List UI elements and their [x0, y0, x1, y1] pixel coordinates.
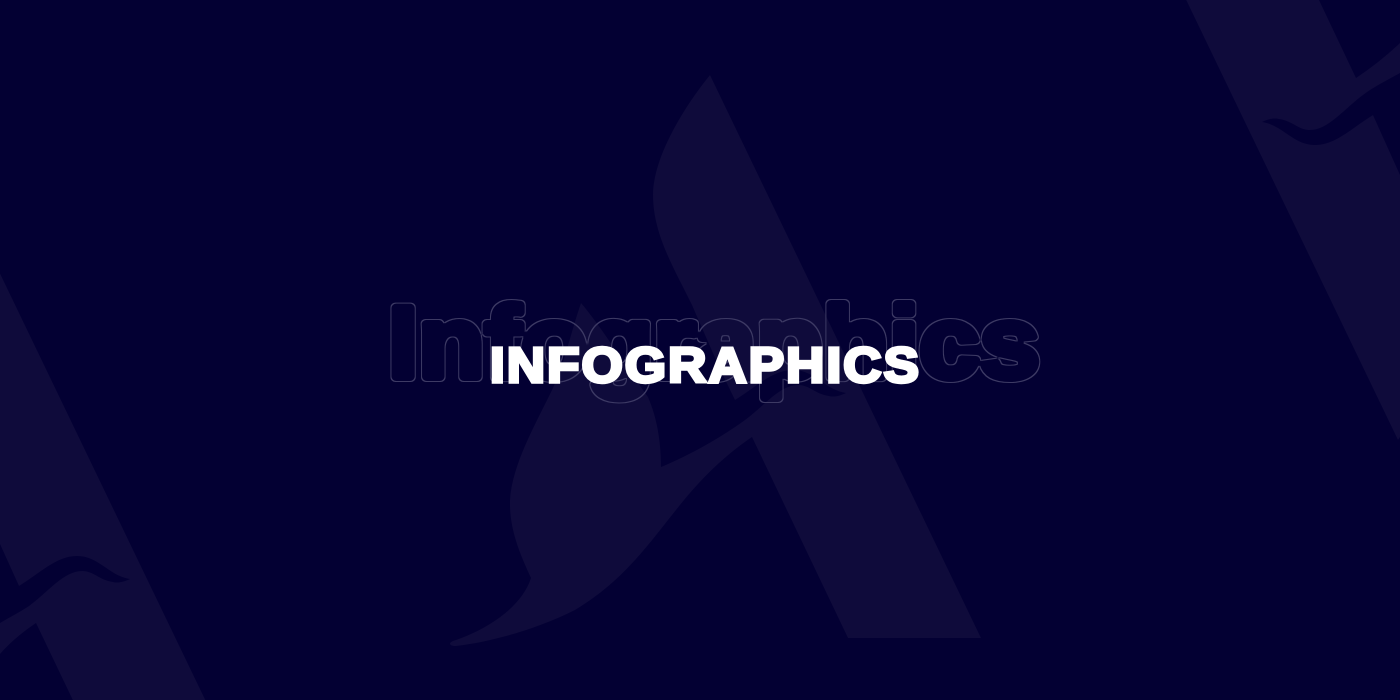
watermark logo: bottom left: [0, 274, 205, 700]
title: INFOGRAPHICS: [490, 339, 921, 393]
watermark logo: center: [450, 75, 981, 646]
watermark logo: top right: [1186, 0, 1400, 440]
outlined background word: Infographics: [388, 286, 1040, 400]
